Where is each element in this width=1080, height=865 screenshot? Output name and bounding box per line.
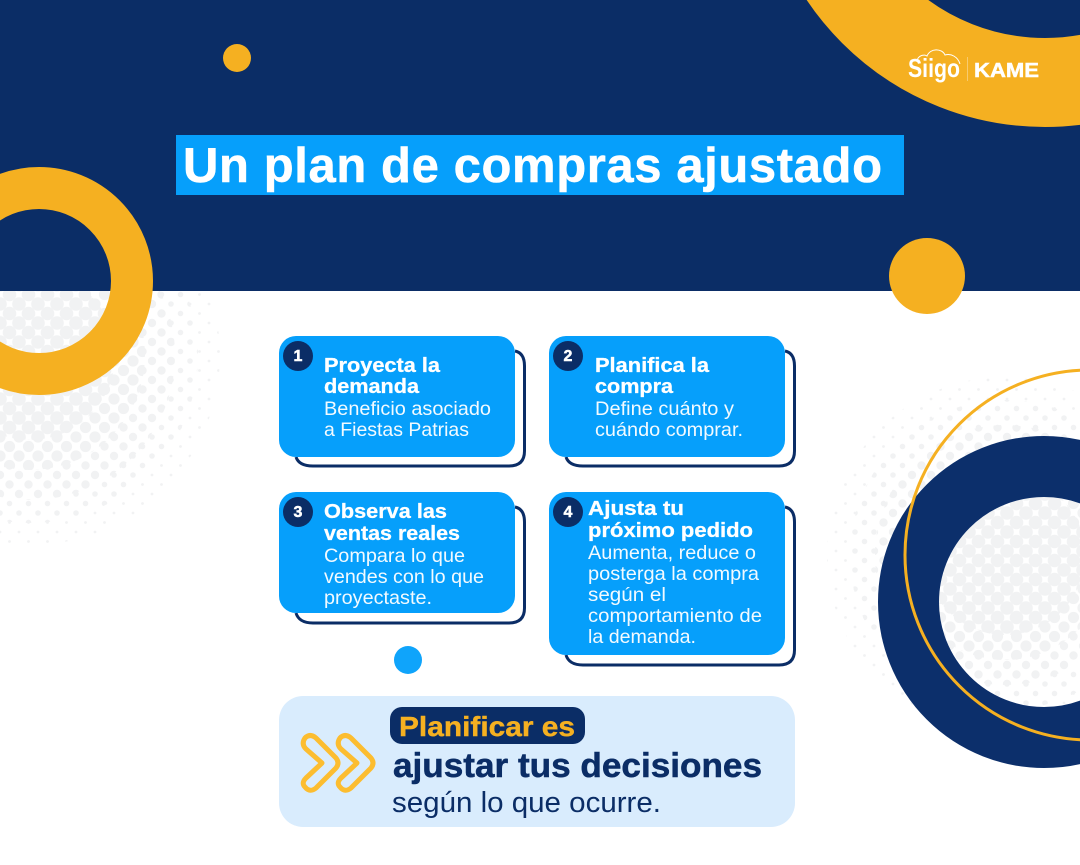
header band	[0, 0, 1080, 291]
panel: step 1: 1	[294, 348, 303, 365]
decorative dot: gold large	[889, 238, 965, 314]
logo text: KAME: KAME	[974, 59, 1039, 82]
callout highlight: Planificar es: Planificar es	[399, 711, 575, 742]
halftone pattern: left	[0, 165, 220, 545]
panel: step 3: 3	[294, 504, 303, 521]
callout text: bold line: ajustar tus decisiones	[393, 747, 762, 785]
panel: step 3: Observa las	[324, 501, 447, 523]
panel: step 2: cuándo comprar.	[595, 419, 743, 441]
callout	[279, 696, 795, 827]
panel: step 1: demanda	[324, 376, 420, 398]
panel: step 4: Aumenta, reduce o	[588, 542, 756, 564]
logo text: Siigo: Siigo	[908, 53, 960, 83]
halftone pattern: right	[827, 377, 1080, 733]
panel: step 4	[549, 492, 794, 665]
panel: step 1	[279, 336, 524, 466]
panel: step 2: compra	[595, 376, 674, 398]
panel: step 4: la demanda.	[588, 626, 696, 648]
panel: step 4: Ajusta tu	[588, 498, 684, 520]
panel: step 1: a Fiestas Patrias	[324, 419, 469, 441]
decorative ring: right thin gold	[905, 370, 1080, 740]
decorative dot: blue	[394, 646, 422, 674]
title: Un plan de compras ajustado	[183, 139, 882, 193]
panel: step 3: vendes con lo que	[324, 566, 484, 588]
panel: step 3: ventas reales	[324, 523, 460, 545]
panel: step 2: Define cuánto y	[595, 398, 734, 420]
panel: step 1: Proyecta la	[324, 355, 441, 377]
panel: step 4: 4	[564, 504, 573, 521]
icon: double chevron	[303, 736, 373, 790]
panel: step 3: Compara lo que	[324, 545, 465, 567]
panel: step 1: Beneficio asociado	[324, 398, 491, 420]
panel: step 4: según el	[588, 584, 666, 606]
callout text: regular line: según lo que ocurre.	[392, 787, 661, 819]
decorative dot: gold small	[223, 44, 251, 72]
decorative ring: right navy	[908, 466, 1080, 738]
logo	[908, 50, 1039, 83]
logo divider	[967, 57, 968, 81]
panel: step 3	[279, 492, 524, 623]
panel: step 4: posterga la compra	[588, 563, 759, 585]
panel: step 4: comportamiento de	[588, 605, 762, 627]
panel: step 4: próximo pedido	[588, 520, 753, 542]
decorative ring: top right	[802, 0, 1080, 82]
panel: step 3: proyectaste.	[324, 587, 432, 609]
logo icon: cloud	[917, 50, 960, 64]
panel: step 2: Planifica la	[595, 355, 710, 377]
panel: step 2: 2	[564, 348, 573, 365]
panel: step 2	[549, 336, 794, 466]
decorative ring: left	[0, 188, 132, 374]
